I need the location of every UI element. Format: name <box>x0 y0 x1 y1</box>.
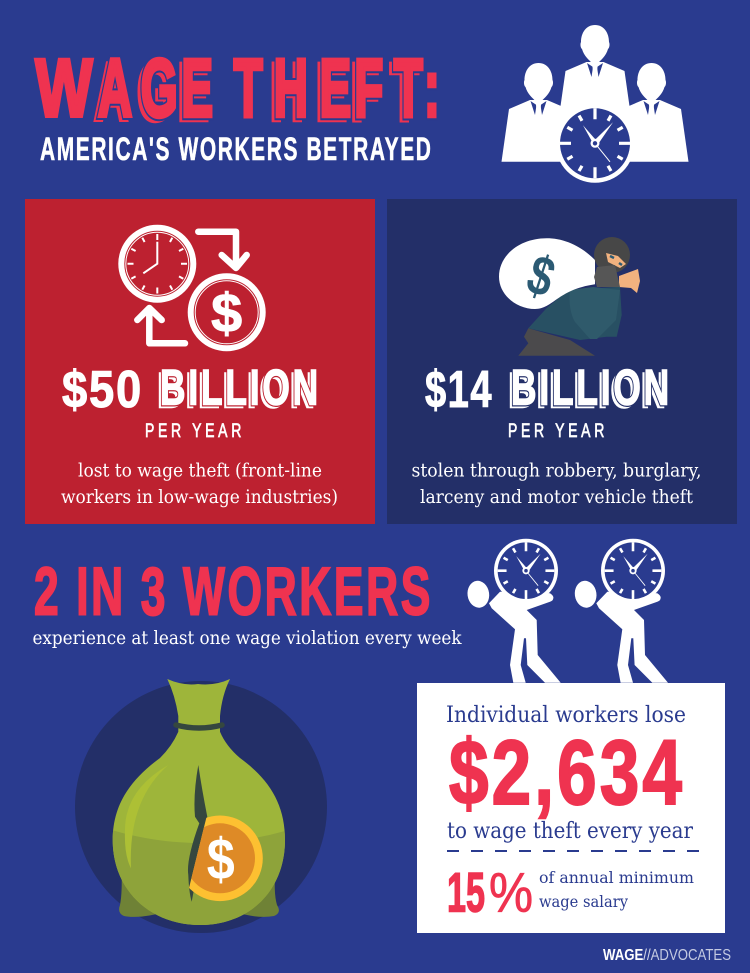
amount: $14 billion: BILLION <box>511 360 672 416</box>
icon: thief with money bag: $ <box>520 242 562 309</box>
description: stolen through robbery, burglary, <box>412 460 702 482</box>
text: individual workers lose: Individual workers lose <box>446 703 686 728</box>
stat: 15 percent: 15 <box>447 860 485 924</box>
amount: $14 billion: BILLION <box>511 360 672 416</box>
stat: 15 percent: % <box>489 860 533 924</box>
title: AGE THEFT: <box>98 44 440 134</box>
icon: clock and coin exchange: $ <box>211 282 242 344</box>
heading: 2 in 3 workers: 2 IN 3 WORKERS <box>34 554 433 630</box>
logo: wage advocates: WAGE//ADVOCATES <box>603 947 731 964</box>
text: of annual minimum wage salary: wage salary <box>539 892 628 911</box>
title: AGE THEFT: <box>94 48 436 138</box>
panel: 14 billion <box>387 199 737 524</box>
per year: PER YEAR <box>145 421 245 442</box>
amount: $50 billion: $50 <box>62 361 143 419</box>
amount: $50 billion <box>62 360 321 419</box>
amount: $50 billion: BILLION <box>157 362 318 418</box>
description: workers in low-wage industries) <box>61 487 338 508</box>
description <box>412 460 702 508</box>
icon: clock and coin exchange <box>121 228 263 348</box>
amount: $50 billion: BILLION <box>160 360 321 416</box>
amount: $2,634: $2,634 <box>449 722 685 824</box>
per year: PER YEAR <box>508 421 608 442</box>
text: of annual minimum wage salary <box>539 868 694 911</box>
description <box>61 460 338 508</box>
icon: workers carrying clocks <box>466 539 668 683</box>
subheading: experience at least one wage violation every week <box>32 628 462 649</box>
icon: thief with money bag <box>499 237 640 356</box>
description: lost to wage theft (front-line <box>78 460 322 482</box>
text: to wage theft every year: to wage theft every year <box>447 819 693 844</box>
icon: leaking money bag <box>75 670 327 933</box>
text: of annual minimum wage salary: of annual minimum <box>539 868 694 887</box>
amount: $14 billion: BILLION <box>508 362 669 418</box>
title: AGE THEFT: <box>98 44 440 134</box>
panel: individual losses <box>417 683 725 933</box>
amount: $50 billion: BILLION <box>160 360 321 416</box>
amount: $14 billion: $14 <box>425 361 493 419</box>
panel: 50 billion <box>25 199 375 524</box>
subtitle: AMERICA'S WORKERS BETRAYED <box>40 131 432 167</box>
description: larceny and motor vehicle theft <box>420 487 694 508</box>
icon: leaking money bag: $ <box>207 827 235 892</box>
title: W <box>36 43 93 134</box>
amount: $14 billion <box>425 360 672 419</box>
icon: workers and clock <box>502 25 688 183</box>
